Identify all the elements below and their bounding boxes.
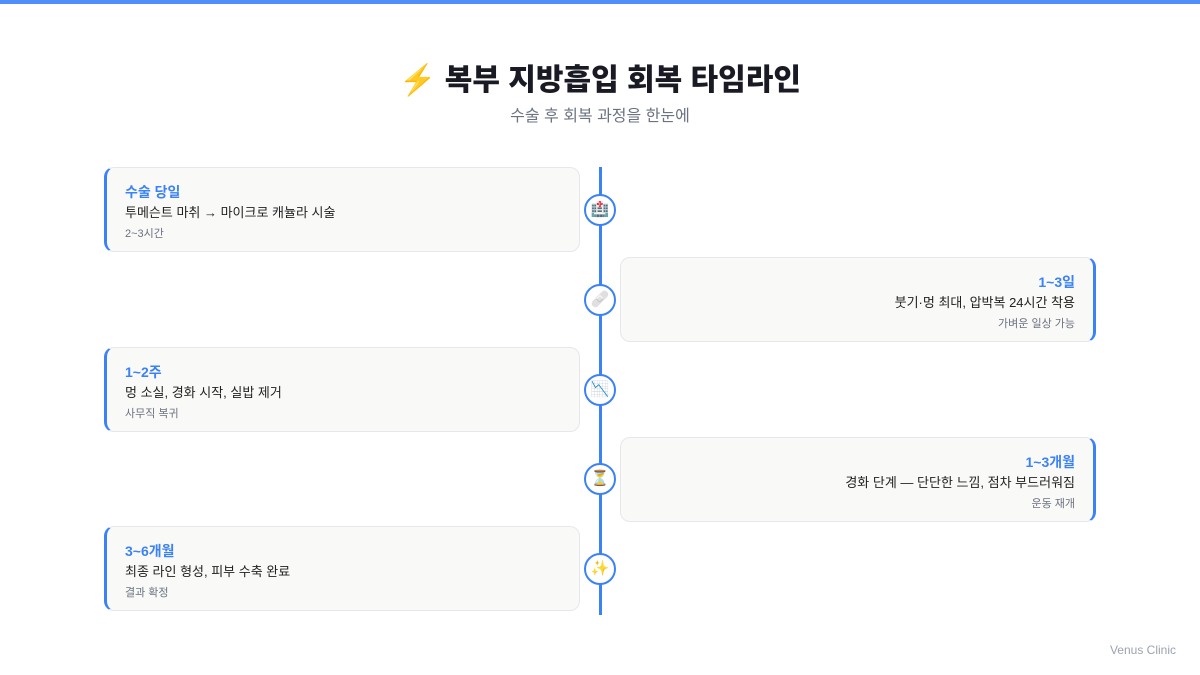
card: 1~3개월: 1~3개월 (1025, 454, 1075, 470)
card: 1~2주 (104, 347, 580, 432)
icon: hourglass: ⏳ (591, 470, 609, 487)
card: 1~3일: 붓기·멍 최대, 압박복 24시간 착용 (895, 295, 1075, 310)
card: 1~3개월 (620, 437, 1096, 522)
title: ⚡ 복부 지방흡입 회복 타임라인 (399, 64, 801, 97)
card: 3~6개월: 3~6개월 (125, 543, 175, 559)
icon: sparkles: ✨ (591, 560, 609, 577)
card: 3~6개월: 최종 라인 형성, 피부 수축 완료 (125, 564, 290, 579)
timeline line (598, 167, 602, 615)
card: 1~2주: 사무직 복귀 (125, 408, 179, 420)
card: 1~2주: 멍 소실, 경화 시작, 실밥 제거 (125, 385, 282, 400)
card: 1~3일: 가벼운 일상 가능 (998, 318, 1075, 330)
card: 3~6개월 (104, 526, 580, 611)
card: 1~3일 (620, 257, 1096, 342)
card: 1~3일: 1~3일 (1038, 274, 1075, 290)
subtitle: 수술 후 회복 과정을 한눈에 (510, 108, 690, 125)
card: 수술 당일 (104, 167, 580, 252)
icon: sparkles (584, 553, 616, 585)
card: 3~6개월: 결과 확정 (125, 587, 169, 599)
icon: bandage (584, 284, 616, 316)
icon: bandage: 🩹 (591, 291, 609, 308)
card: 1~3개월: 경화 단계 — 단단한 느낌, 점차 부드러워짐 (845, 475, 1075, 490)
card: 1~2주: 1~2주 (125, 364, 162, 380)
card: 수술 당일: 2~3시간 (125, 228, 164, 240)
card: 수술 당일: 투메슨트 마취 → 마이크로 캐뉼라 시술 (125, 205, 335, 220)
card: 수술 당일: 수술 당일 (125, 184, 180, 200)
icon: hospital (584, 194, 616, 226)
icon: chart down (584, 374, 616, 406)
icon: hourglass (584, 463, 616, 495)
card: 1~3개월: 운동 재개 (1031, 498, 1075, 510)
icon: chart down: 📉 (591, 381, 609, 398)
icon: hospital: 🏥 (591, 201, 609, 218)
footer: Venus Clinic (1110, 643, 1176, 657)
